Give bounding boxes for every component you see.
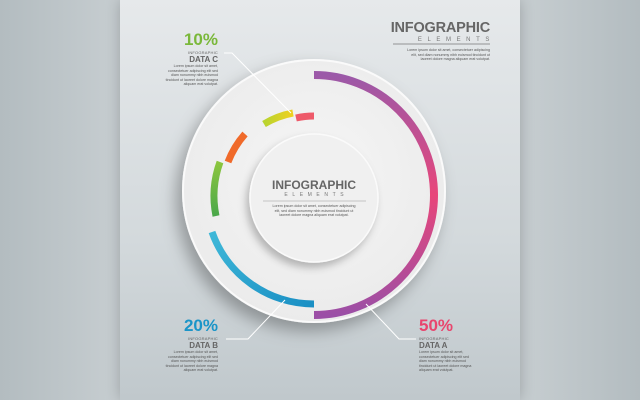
header title: elit, sed diam nonummy nibh euismod tincidunt ut <box>411 53 490 57</box>
label: data C 10%: Lorem ipsum dolor sit amet, consectetuer adipiscing elit sed diam nonummy nibh euismod tincidunt ut laoreet dolore magna aliquam erat volutpat. <box>166 64 218 86</box>
pointer lines <box>224 44 490 339</box>
header title: INFOGRAPHIC <box>391 20 490 36</box>
label: data A 50%: DATA A <box>419 341 447 350</box>
main disc <box>183 60 445 322</box>
header title: laoreet dolore magna aliquam erat volutpat. <box>421 57 490 61</box>
label: data C 10%: DATA C <box>189 55 218 64</box>
inner disc <box>250 134 378 262</box>
arc: orange <box>228 134 245 162</box>
label: data B 20%: DATA B <box>189 341 218 350</box>
label: data B 20% <box>166 316 218 372</box>
label: data B 20%: 20% <box>184 316 218 335</box>
center text: laoreet dolore magna aliquam erat volutpat. <box>279 213 349 217</box>
center text: INFOGRAPHIC <box>272 178 356 192</box>
label: data B 20%: Lorem ipsum dolor sit amet, consectetuer adipiscing elit sed diam nonummy nibh euismod tincidunt ut laoreet dolore magna aliquam erat volutpat. <box>166 350 218 372</box>
arc: data B 20% <box>212 232 314 304</box>
center text: ELEMENTS <box>284 192 348 198</box>
label: data C 10% <box>166 30 218 86</box>
label: data A 50% <box>419 316 472 372</box>
label: data A 50%: 50% <box>419 316 453 335</box>
label: data A 50%: Lorem ipsum dolor sit amet, consectetuer adipiscing elit sed diam nonummy nibh euismod tincidunt ut laoreet dolore magna aliquam erat volutpat. <box>419 350 471 372</box>
header title <box>391 20 495 61</box>
header title: Lorem ipsum dolor sit amet, consectetuer adipiscing <box>407 48 490 52</box>
center text: Lorem ipsum dolor sit amet, consectetuer adipiscing <box>273 204 355 208</box>
center text <box>272 178 356 217</box>
header title: ELEMENTS <box>418 37 495 43</box>
center text: elit, sed diam nonummy nibh euismod tincidunt ut <box>275 209 353 213</box>
arc: small pink <box>296 116 314 118</box>
arc: green <box>214 162 220 216</box>
background panel <box>120 0 520 400</box>
arc: data A 50% <box>314 75 434 315</box>
arc: data C yellow <box>264 113 293 124</box>
label: data A 50%: INFOGRAPHIC <box>419 336 449 341</box>
label: data C 10%: INFOGRAPHIC <box>188 50 218 55</box>
label: data C 10%: 10% <box>184 30 218 49</box>
label: data B 20%: INFOGRAPHIC <box>188 336 218 341</box>
